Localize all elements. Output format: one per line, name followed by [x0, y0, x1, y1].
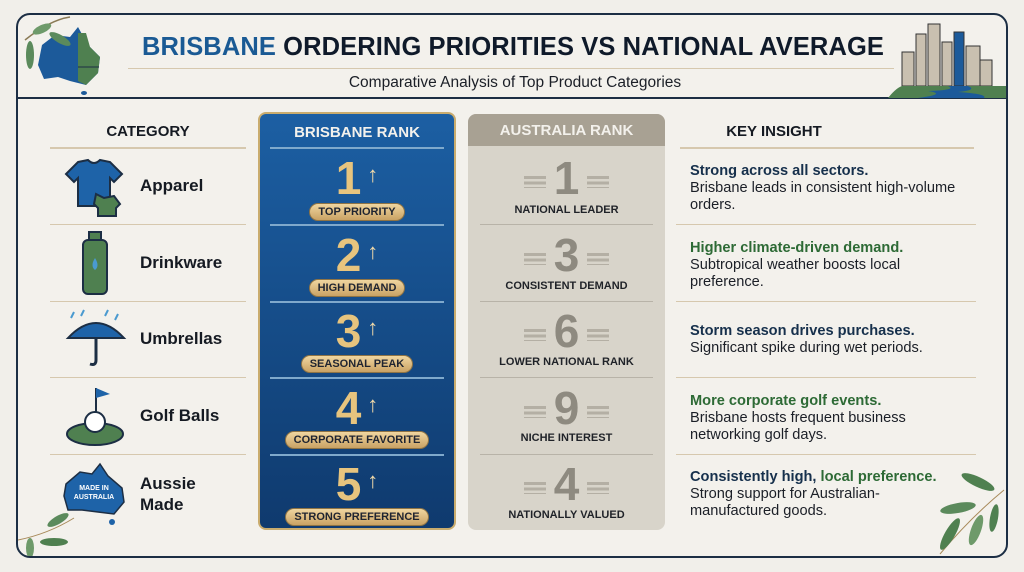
insight: golf: Brisbane hosts frequent business [690, 410, 906, 426]
insight: golf [690, 393, 906, 443]
text: aussie made [140, 474, 196, 514]
icon: brisbane skyline [888, 24, 1006, 98]
text: 2 ↑ [336, 229, 378, 281]
insight: aussie made: Consistently high, local preference. [690, 469, 937, 485]
heading: brisbane rank: BRISBANE RANK [294, 124, 420, 141]
heading: key insight: KEY INSIGHT [726, 123, 822, 140]
text: 4 [554, 458, 579, 510]
text: 9 [554, 382, 579, 434]
panel: brisbane rank [258, 112, 456, 530]
decoration: leaves bottom left [18, 513, 74, 556]
panel: brisbane rank: CORPORATE FAVORITE [294, 434, 420, 446]
text: golf balls: Golf Balls [140, 406, 219, 425]
decoration: leaves bottom right [940, 473, 1004, 554]
icon: made in australia: AUSTRALIA [74, 494, 114, 501]
icon: made in australia [63, 462, 125, 525]
subtitle: Comparative Analysis of Top Product Categories [349, 74, 681, 91]
heading: australia rank: AUSTRALIA RANK [500, 122, 633, 139]
australia numbers [524, 152, 609, 204]
insight: drinkware: Higher climate-driven demand. [690, 240, 903, 256]
text: NATIONALLY VALUED [508, 509, 625, 521]
insight: aussie made: Strong support for Australian- [690, 486, 880, 502]
text: 4 ↑ [336, 382, 378, 434]
australia numbers: 1 [554, 152, 579, 204]
panel: brisbane rank: SEASONAL PEAK [310, 358, 404, 370]
icon: australia map top-left [24, 16, 100, 95]
text: 3 [554, 229, 579, 281]
insight: apparel: Strong across all sectors. [690, 163, 868, 179]
brisbane numbers: 1 ↑ [336, 152, 378, 204]
insight: apparel: orders. [690, 197, 735, 213]
heading: category: CATEGORY [106, 123, 190, 140]
title: BRISBANE ORDERING PRIORITIES VS NATIONAL AVERAGE [142, 33, 884, 61]
text: CONSISTENT DEMAND [505, 280, 628, 292]
insight: aussie made: manufactured goods. [690, 503, 827, 519]
text: 5 ↑ [336, 458, 378, 510]
text: LOWER NATIONAL RANK [499, 356, 634, 368]
icon: apparel [64, 158, 124, 217]
panel: brisbane rank: STRONG PREFERENCE [294, 511, 420, 523]
text: 3 ↑ [336, 305, 378, 357]
insight: drinkware [690, 240, 903, 290]
insight: golf: More corporate golf events. [690, 393, 881, 409]
panel: australia rank [468, 114, 665, 530]
rank pills: TOP PRIORITY [318, 206, 396, 218]
insight: drinkware: Subtropical weather boosts local [690, 257, 900, 273]
text: drinkware: Drinkware [140, 253, 222, 272]
australia labels: NATIONAL LEADER [514, 204, 619, 216]
icon: golf ball [66, 388, 124, 446]
insight: drinkware: preference. [690, 274, 764, 290]
text: NICHE INTEREST [521, 432, 612, 444]
insight: umbrellas [690, 323, 923, 356]
text: 6 [554, 305, 579, 357]
icon: drinkware [82, 231, 108, 295]
icon: made in australia: MADE IN [79, 485, 109, 492]
insight: umbrellas: Significant spike during wet periods. [690, 340, 923, 356]
panel: brisbane rank: HIGH DEMAND [318, 282, 396, 294]
text: aussie made: Aussie [140, 474, 196, 493]
insight: golf: networking golf days. [690, 427, 827, 443]
text: aussie made: Made [140, 495, 183, 514]
insight: umbrellas: Storm season drives purchases. [690, 323, 915, 339]
insight: apparel [690, 163, 955, 213]
text: apparel: Apparel [140, 176, 203, 195]
insight: aussie made [690, 469, 937, 519]
insight: apparel: Brisbane leads in consistent high-volume [690, 180, 955, 196]
icon: umbrella [66, 310, 126, 366]
text: umbrellas: Umbrellas [140, 329, 222, 348]
